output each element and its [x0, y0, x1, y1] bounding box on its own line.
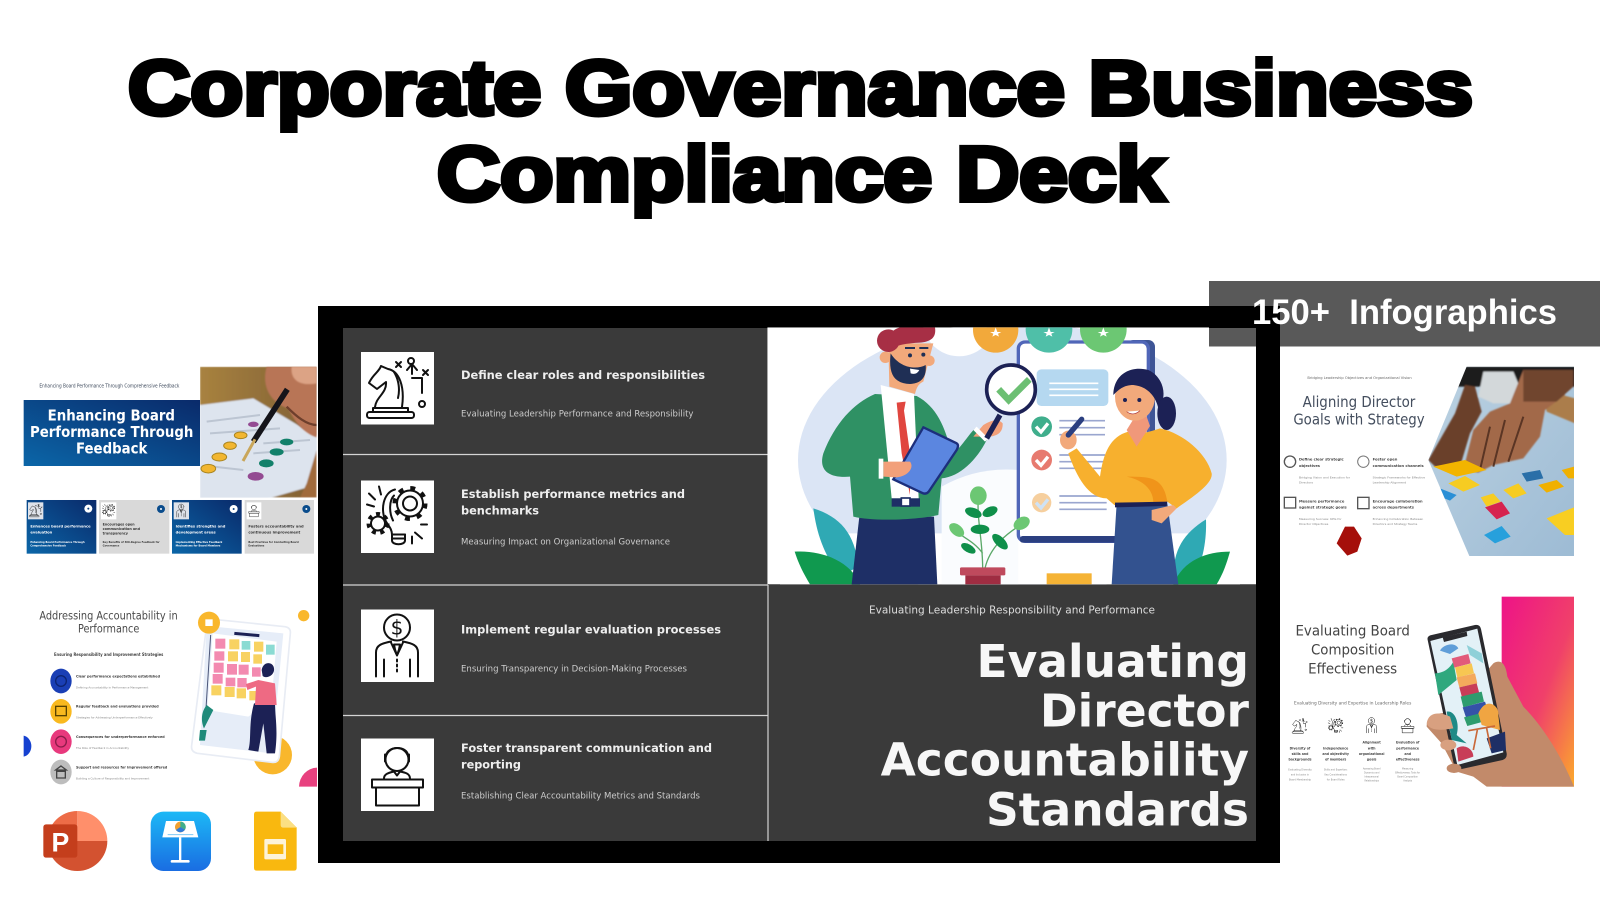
list item: transparent communication: reporting: [461, 758, 521, 772]
slide heading: Goals with Strategy: [1293, 410, 1425, 428]
feature grid: Bridging Vision and Execution for: [1299, 477, 1350, 480]
card 2: [99, 500, 169, 554]
banner text: 150+ Infographics: 150+ Infographics: [1252, 293, 1557, 332]
column 4: performance: [1396, 746, 1419, 750]
list row 1: [50, 669, 160, 693]
list row 4: Building a Culture of Responsibility and Improvement: [76, 776, 149, 780]
illustration: woman with pen: [1060, 369, 1212, 584]
panel: strategy slide: [1284, 367, 1575, 557]
list item: performance metrics: Establish performance metrics and: [461, 487, 685, 501]
panel: accountability slide: [24, 608, 317, 787]
illustration: man with magnifier: [822, 327, 1035, 584]
feature grid: Strategic Frameworks for Effective: [1373, 477, 1426, 480]
feature grid: objectives: [1299, 464, 1320, 468]
card 3: [172, 500, 242, 554]
column 1: Evaluating Diversity: [1288, 769, 1312, 772]
feature grid: Measuring Success: KPIs for: [1299, 518, 1342, 521]
title: [128, 46, 1473, 218]
photo: hand holding phone: [1427, 625, 1574, 787]
feature grid: Foster open: [1373, 458, 1397, 462]
feature grid: against strategic goals: [1299, 506, 1347, 510]
column 2: of members: [1325, 758, 1346, 762]
column 2: Skills and Expertise:: [1324, 769, 1348, 772]
heading: slide title: [881, 635, 1250, 836]
slide heading: Evaluating Board: [1295, 624, 1410, 640]
illustration: clipboard checklist: [973, 306, 1155, 543]
photo: hands arranging sticky notes: [1427, 367, 1575, 557]
illustration: two people reviewing a checklist: [767, 327, 1256, 584]
banner title: Performance Through: [30, 423, 193, 441]
banner title: [24, 400, 200, 466]
column 1: skills and: [1292, 752, 1308, 756]
list item: transparent communication: Establishing Clear Accountability Metrics and Standards: [461, 792, 700, 802]
list row 2: Regular feedback and evaluations provided: [76, 705, 159, 709]
feature grid: across departments: [1373, 506, 1414, 510]
heading: slide title: Director: [1040, 684, 1250, 738]
icon: PowerPoint: [43, 811, 107, 871]
title: Corporate Governance Business: [128, 46, 1473, 132]
feature grid: Encourage collaboration: [1373, 499, 1423, 503]
slide heading: [39, 608, 178, 636]
feature grid: Leadership Alignment: [1373, 481, 1406, 484]
list item: evaluation processes: Implement regular evaluation processes: [461, 622, 721, 636]
card 2: Key Benefits of 360-Degree Feedback for: [103, 541, 161, 544]
list row 3: [50, 729, 165, 754]
feature grid: Enhancing Collaboration Between: [1373, 518, 1424, 521]
slide heading: Composition: [1311, 643, 1394, 659]
list row 2: Strategies for Addressing Underperformance Effectively: [76, 716, 153, 720]
decorative shapes: [24, 610, 317, 787]
column 3: Interpersonal: [1364, 776, 1379, 779]
list item: performance metrics: [361, 480, 685, 553]
illustration: tablet with sticky notes: [192, 612, 290, 762]
caption: Bridging Leadership Objectives and Organizational Vision: [1307, 376, 1412, 380]
column 4: effectiveness: [1396, 758, 1420, 762]
card 4: [245, 500, 314, 554]
column 3: with: [1368, 746, 1376, 750]
gradient block: [1502, 597, 1574, 787]
column 1: [1288, 718, 1312, 782]
list item: transparent communication: Foster transparent communication and: [461, 741, 712, 755]
card 3: Implementing Effective Feedback: [176, 541, 223, 544]
frame overlap: [1209, 306, 1280, 346]
card 4: continuous improvement: [248, 531, 301, 535]
column 3: organizational: [1359, 752, 1384, 756]
card 1: Enhancing Board Performance Through: [30, 541, 85, 544]
column 1: Board Membership: [1289, 779, 1312, 782]
column 1: Diversity of: [1290, 746, 1311, 750]
red heptagon: [1337, 527, 1362, 556]
illustration: leaves: [795, 508, 1230, 584]
list row 3: Consequences for underperformance enforced: [76, 735, 165, 739]
banner background: [1209, 281, 1600, 346]
column 2: for Board Roles: [1327, 779, 1345, 782]
card 2: Encourages open: [103, 523, 135, 527]
column 3: Assessing Board: [1363, 768, 1381, 771]
column 2: and objectivity: [1322, 752, 1349, 756]
list row 4: [50, 760, 168, 784]
feature grid: Director Objectives: [1299, 523, 1329, 526]
slide heading: Performance: [78, 622, 139, 636]
panel: main slide: [318, 306, 1280, 863]
list item: performance metrics: benchmarks: [461, 504, 539, 518]
card 4: Fosters accountability and: [248, 524, 304, 528]
app icons: [43, 811, 297, 871]
list row 1: Defining Accountability in Performance Management: [76, 685, 148, 689]
card 4: Evaluations: [248, 545, 265, 548]
column 4: Effectiveness: Tools for: [1395, 772, 1420, 775]
column 4: Board Composition: [1397, 776, 1419, 779]
list item: evaluation processes: Ensuring Transparency in Decision-Making Processes: [461, 665, 687, 675]
caption: Enhancing Board Performance Through Comprehensive Feedback: [39, 383, 179, 389]
list item: define roles: Evaluating Leadership Performance and Responsibility: [461, 409, 694, 419]
card 1: Comprehensive Feedback: [30, 545, 67, 548]
caption: Evaluating Diversity and Expertise in Leadership Roles: [1294, 701, 1411, 706]
feature grid: Measure performance: [1299, 499, 1344, 503]
panel: board feedback slide: [24, 367, 320, 554]
list item: performance metrics: Measuring Impact on Organizational Governance: [461, 538, 670, 548]
feature grid: communication channels: [1373, 464, 1424, 468]
list row 1: Clear performance expectations established: [76, 674, 160, 678]
column 2: Key Considerations: [1325, 774, 1348, 777]
feature grid: Directors: [1299, 481, 1314, 484]
card 3: Mechanisms for Board Members: [176, 545, 221, 548]
column 4: [1395, 719, 1420, 783]
text: slide subtitle: Evaluating Leadership Responsibility and Performance: [869, 604, 1155, 616]
column 4: Evaluation of: [1396, 741, 1420, 745]
heading: slide title: Accountability: [881, 734, 1249, 786]
feature grid: [1284, 456, 1426, 526]
column 4: and: [1404, 752, 1411, 756]
slide heading: Aligning Director: [1303, 393, 1416, 411]
card 1: [27, 500, 96, 554]
card 1: evaluation: [30, 531, 53, 535]
card 2: Governance: [103, 545, 120, 548]
column 4: Analysis: [1403, 780, 1413, 783]
list item: evaluation processes: [361, 610, 721, 682]
column 3: goals: [1367, 758, 1377, 762]
list row 3: The Role of Feedback in Accountability: [76, 746, 130, 750]
column 1: and Inclusion in: [1291, 774, 1310, 777]
list item: transparent communication: [361, 738, 712, 811]
banner title: Enhancing Board: [48, 407, 175, 425]
column 3: Alignment: [1363, 741, 1381, 745]
panel: board composition slide: [1288, 597, 1574, 787]
heading: slide title: Standards: [986, 784, 1249, 836]
icon: Google Slides: [254, 812, 297, 871]
list row 4: Support and resources for improvement offered: [76, 765, 168, 769]
list item: define roles: [361, 352, 705, 424]
column 2: [1322, 718, 1349, 782]
banner title: Feedback: [76, 440, 148, 458]
card 2: transparency: [103, 531, 129, 535]
column 2: Independence: [1323, 746, 1348, 750]
list row 2: [50, 699, 159, 724]
heading: slide title: Evaluating: [977, 635, 1249, 688]
slide heading: Effectiveness: [1308, 661, 1397, 677]
icon: PowerPoint: P: [51, 828, 69, 858]
slide subheading: Ensuring Responsibility and Improvement Strategies: [54, 652, 164, 657]
photo: pen on survey sheet: [200, 367, 320, 500]
feature grid: Directors and Strategy Teams: [1373, 523, 1418, 526]
column 4: Measuring: [1402, 768, 1414, 771]
illustration: plant: [947, 486, 1032, 584]
column 1: backgrounds: [1289, 758, 1312, 762]
slide heading: [1293, 393, 1425, 428]
list item: define roles: Define clear roles and responsibilities: [461, 368, 705, 382]
column 3: Dynamics and: [1364, 772, 1380, 775]
slide heading: Addressing Accountability in: [39, 608, 178, 622]
card 4: Best Practices for Conducting Board: [248, 541, 299, 544]
slide heading: [1295, 624, 1410, 677]
column 3: Relationships: [1364, 780, 1380, 783]
feature grid: Define clear strategic: [1299, 458, 1344, 462]
card 1: Enhances board performance: [30, 524, 91, 528]
card 2: communication and: [103, 527, 140, 531]
column 3: [1359, 718, 1384, 783]
card 3: Identifies strengths and: [176, 524, 226, 528]
icon: Keynote: [151, 812, 211, 871]
card 3: development areas: [176, 531, 216, 535]
title: Compliance Deck: [437, 132, 1165, 218]
